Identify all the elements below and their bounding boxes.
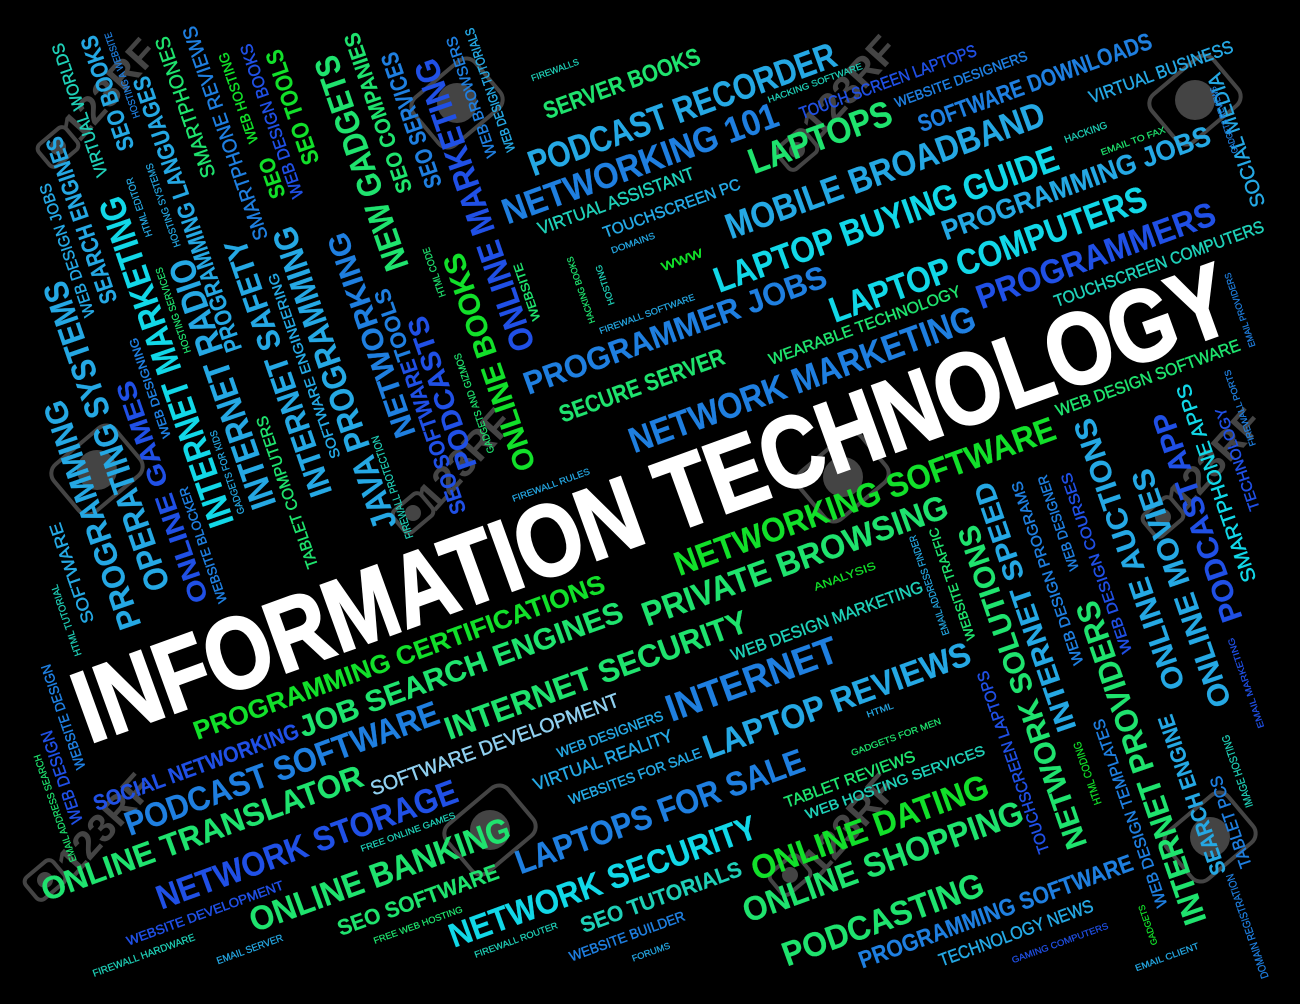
lower horizontal words: SEO SOFTWARE — [334, 859, 502, 941]
left vertical words: TABLET COMPUTERS — [254, 414, 322, 570]
upper right words: FIREWALL SOFTWARE — [598, 292, 696, 336]
lower horizontal words: EMAIL CLIENT — [1134, 941, 1201, 973]
left vertical words: WEB HOSTING — [215, 50, 261, 146]
upper right words: PROGRAMMERS — [971, 195, 1221, 317]
lower horizontal words: WEB DESIGN MARKETING — [728, 577, 926, 665]
upper right words: VIRTUAL ASSISTANT — [535, 163, 697, 239]
left vertical words: HTML EDITOR — [125, 176, 155, 238]
right vertical words: WEBSITE TRAFFIC — [926, 526, 978, 642]
left vertical words: WEB DESIGNING — [126, 336, 174, 440]
upper right words: SERVER BOOKS — [540, 43, 704, 125]
right vertical words: PODCAST APP — [1147, 408, 1249, 626]
lower horizontal words — [36, 410, 1201, 980]
lower horizontal words: EMAIL SERVER — [215, 933, 285, 967]
left vertical words: ONLINE BOOKS — [437, 249, 543, 475]
lower horizontal words: FIREWALL HARDWARE — [91, 932, 197, 980]
left vertical words: SMARTPHONE REVIEWS — [179, 23, 273, 243]
lower horizontal words: WEBSITE DEVELOPMENT — [124, 878, 286, 948]
left vertical words: HACKING BOOKS — [565, 255, 597, 325]
lower horizontal words: PODCAST SOFTWARE — [120, 694, 444, 844]
watermark stamps: 123RF — [53, 31, 167, 149]
lower horizontal words: WEBSITE BUILDER — [567, 908, 687, 964]
right vertical words: ONLINE AUCTIONS — [1068, 414, 1192, 694]
left vertical words: EMAIL ADDRESS SEARCH — [32, 753, 80, 863]
lower horizontal words: ONLINE BANKING — [244, 810, 516, 940]
left vertical words: SMARTPHONES — [152, 33, 220, 181]
left vertical words: WEB BROWSERS — [443, 34, 501, 160]
lower horizontal words: WEB DESIGNERS — [555, 707, 665, 761]
lower horizontal words: NETWORK STORAGE — [151, 773, 463, 917]
left vertical words: ONLINE MARKETING — [407, 54, 543, 356]
lower horizontal words: GAMING COMPUTERS — [1010, 921, 1110, 965]
right vertical words: SEARCH ENGINE — [1153, 712, 1231, 878]
lower horizontal words: WEBSITES FOR SALE — [566, 745, 704, 807]
lower horizontal words: WEB HOSTING SERVICES — [803, 742, 987, 822]
upper right words: PROGRAMMING JOBS — [937, 120, 1215, 246]
left vertical words: INTERNET MARKETING — [90, 191, 242, 533]
right vertical words: GADGETS REVIEWS — [1208, 85, 1240, 155]
lower horizontal words: ONLINE DATING — [746, 767, 994, 889]
lower horizontal words: INTERNET SECURITY — [439, 603, 753, 747]
lower horizontal words: PRIVATE BROWSING — [637, 488, 953, 634]
upper right words: WEBSITE DESIGNERS — [892, 48, 1030, 110]
right vertical words: SOCIAL MEDIA — [1204, 70, 1270, 210]
lower horizontal words: TABLET REVIEWS — [782, 748, 918, 812]
left vertical words: JAVA PROGRAMMING — [265, 221, 405, 535]
upper right words: EMAIL TO FAX — [1099, 125, 1167, 157]
upper right words: PROGRAMMER JOBS — [518, 258, 832, 402]
left vertical words: SEO TOOLS — [261, 46, 325, 168]
upper right words: TOUCHSCREEN PC — [601, 176, 743, 242]
lower horizontal words: NETWORKING SOFTWARE — [669, 410, 1061, 584]
lower horizontal words: TECHNOLOGY NEWS — [936, 896, 1096, 970]
left vertical words: SEARCH ENGINES — [41, 133, 123, 307]
right vertical words: FIREWALL PORTS — [1222, 369, 1258, 447]
lower horizontal words: ANALYSIS — [812, 560, 878, 594]
right vertical words: TECHNOLOGY — [1212, 405, 1264, 513]
lower horizontal words: HTML — [865, 701, 895, 719]
left vertical words: HOSTING — [593, 264, 617, 306]
right vertical words: GADGETS — [1136, 904, 1160, 946]
lower horizontal words: SOFTWARE DEVELOPMENT — [368, 690, 622, 800]
left vertical words: SEO — [253, 154, 291, 202]
left vertical words: INTERNET SAFETY — [217, 234, 339, 502]
lower horizontal words: NETWORK SECURITY — [444, 808, 762, 955]
upper right words: WEARABLE TECHNOLOGY — [767, 283, 964, 369]
right vertical words: WEB DESIGN TEMPLATES — [1091, 717, 1171, 909]
lower horizontal words: SEO TUTORIALS — [577, 856, 745, 938]
watermark stamps: 123RF — [48, 766, 162, 884]
left vertical words: WEB DESIGN — [37, 728, 87, 826]
left vertical words: SOFTWARE ENGINEERING — [265, 271, 343, 461]
lower horizontal words: LAPTOP REVIEWS — [698, 635, 976, 767]
upper right words: HACKING — [1063, 120, 1109, 146]
right vertical words: DOMAIN REGISTRATION — [1224, 872, 1272, 980]
right vertical words: ONLINE MOVIES — [1126, 464, 1238, 712]
left vertical words: FIREWALL PROTECTION — [370, 434, 416, 540]
left vertical words: NEW GADGETS — [307, 50, 417, 276]
left vertical words: HTML TUTORIAL — [49, 582, 84, 657]
right vertical words: WEB DESIGN COURSES — [1058, 470, 1136, 656]
left vertical words: HOSTING SYSTEMS — [144, 161, 184, 248]
right vertical words: TOUCHSCREEN LAPTOPS — [975, 668, 1053, 856]
upper right words: TOUCH SCREEN LAPTOPS — [797, 41, 979, 123]
watermark stamps: 123RF — [408, 401, 522, 519]
left vertical words: HOSTING SERVICES — [154, 265, 194, 354]
left vertical words: PROGRAMMING LANGUAGES — [128, 73, 248, 355]
watermark stamps: 123RF — [793, 28, 907, 146]
upper right words: FIREWALL RULES — [511, 466, 591, 504]
lower horizontal words: FIREWALL ROUTER — [473, 920, 560, 960]
left vertical words: PODCASTS — [401, 312, 483, 474]
upper right words: MOBILE BROADBAND — [720, 93, 1050, 247]
left vertical words: SEO BOOKS — [76, 32, 140, 154]
lower horizontal words: FREE ONLINE GAMES — [359, 810, 457, 854]
lower horizontal words: VIRTUAL REALITY — [531, 725, 675, 795]
left vertical words: SEO SOFTWARE — [395, 356, 471, 518]
left vertical words: WEB DESIGN BOOKS — [237, 41, 307, 201]
watermark stamps: 123RF — [1158, 401, 1272, 519]
lower horizontal words: JOB SEARCH ENGINES — [294, 596, 628, 744]
upper right words: DOMAINS — [610, 230, 656, 256]
left vertical words: ONLINE GAMES — [110, 377, 214, 607]
right vertical words: INTERNET PROVIDERS — [1069, 596, 1213, 930]
upper right words: LAPTOP COMPUTERS — [824, 177, 1152, 331]
left vertical words: HTML CODE — [421, 245, 449, 298]
lower horizontal words: PROGRAMMING CERTIFICATIONS — [189, 568, 609, 746]
upper right words: LAPTOPS — [743, 92, 897, 182]
lower horizontal words: ONLINE TRANSLATOR — [36, 758, 368, 908]
right vertical words: HTML CODING — [1072, 740, 1104, 806]
upper right words: SECURE SERVER — [556, 344, 728, 428]
right vertical words: EMAIL MARKETING — [1226, 636, 1266, 730]
upper right words: HACKING SOFTWARE — [766, 61, 864, 105]
upper right words: LAPTOP BUYING GUIDE — [708, 137, 1064, 301]
right vertical words: EMAIL PROVIDERS — [1223, 271, 1257, 349]
left vertical words — [32, 23, 617, 863]
right vertical words — [908, 70, 1272, 980]
left vertical words: WEB DESIGN JOBS — [37, 181, 99, 319]
left vertical words: SOFTWARE — [46, 520, 98, 626]
left vertical words: WEB DESIGN TUTORIALS — [462, 26, 518, 154]
left vertical words: OPERATING SYSTEMS — [36, 276, 178, 596]
upper right words: WEB DESIGN SOFTWARE — [1053, 336, 1243, 420]
right vertical words: SMARTPHONE APPS — [1173, 381, 1261, 585]
upper right words: FIREWALLS — [530, 57, 580, 83]
upper right words: WWW — [659, 246, 705, 274]
upper right words — [496, 28, 1267, 504]
right vertical words: IMAGE HOSTING — [1220, 733, 1256, 809]
left vertical words: GADGETS AND GIZMOS — [453, 351, 497, 454]
left vertical words: WEBSITE BLOCKER — [176, 485, 230, 605]
right vertical words: TABLET PCS — [1206, 774, 1256, 870]
watermark stamps: 123RF — [793, 766, 907, 884]
upper right words: NETWORKING 101 — [496, 94, 784, 232]
lower horizontal words: SOCIAL NETWORKING — [90, 718, 302, 816]
upper right words: PODCAST RECORDER — [522, 34, 842, 184]
left vertical words: TOOLS — [369, 285, 417, 365]
left vertical words: SEO COMPANIES — [339, 30, 417, 196]
lower horizontal words: FORUMS — [630, 940, 672, 964]
left vertical words: HOSTING A WEBSITE — [103, 30, 143, 119]
upper right words: VIRTUAL BUSINESS — [1086, 37, 1236, 107]
right vertical words: INTERNET SPEED — [968, 478, 1082, 736]
upper right words: NETWORK MARKETING — [623, 297, 981, 461]
left vertical words: NETWORKING — [321, 228, 423, 442]
lower horizontal words: FREE WEB HOSTING — [372, 904, 464, 946]
lower horizontal words: PODCASTING — [777, 866, 989, 974]
left vertical words: WEBSITE DESIGN — [38, 662, 88, 772]
lower horizontal words: GADGETS FOR MEN — [850, 716, 942, 758]
left vertical words: VIRTUAL WORLDS — [48, 41, 112, 179]
right vertical words: NETWORK SOLUTIONS — [952, 521, 1094, 853]
lower horizontal words: LAPTOPS FOR SALE — [510, 742, 810, 882]
left vertical words: GADGETS FOR KIDS — [208, 428, 248, 515]
left vertical words: SEO SERVICES — [376, 48, 448, 192]
lower horizontal words: ONLINE SHOPPING — [737, 794, 1029, 930]
right vertical words: WEB DESIGNER — [1034, 473, 1082, 573]
right vertical words: EMAIL ADDRESS FINDER — [908, 534, 952, 636]
upper right words: SOFTWARE DOWNLOADS — [914, 28, 1156, 138]
left vertical words: INTERNET RADIO — [160, 253, 284, 515]
right vertical words: WEB DESIGN PROGRAMS — [1009, 479, 1087, 667]
upper right words: TOUCHSCREEN COMPUTERS — [1051, 217, 1267, 311]
left vertical words: WEBSITE — [511, 261, 543, 323]
left vertical words: PROGRAMMING — [36, 396, 148, 634]
lower horizontal words: PROGRAMMING SOFTWARE — [855, 850, 1137, 974]
lower horizontal words: INTERNET — [660, 629, 844, 731]
